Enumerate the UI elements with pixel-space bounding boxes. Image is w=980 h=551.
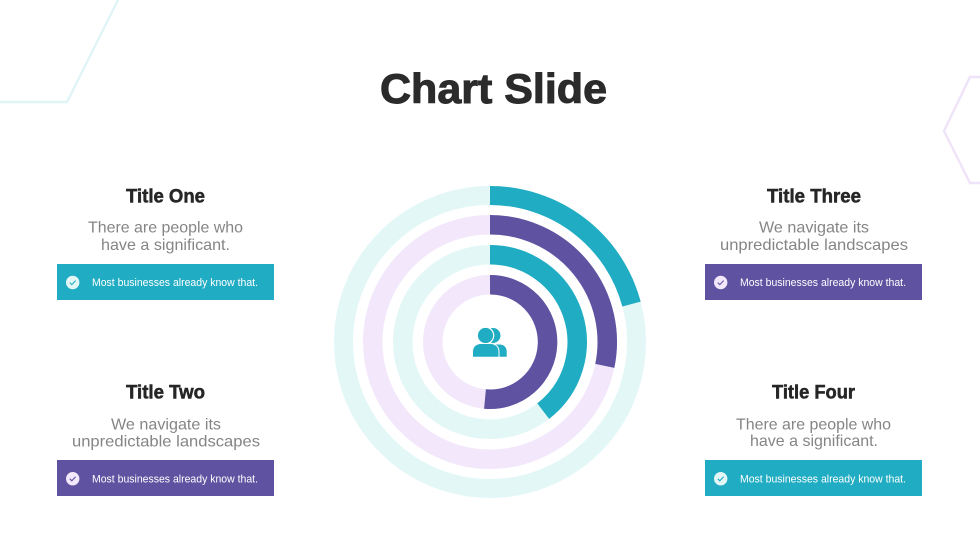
text block: title four xyxy=(736,416,891,450)
ring 2 track xyxy=(373,225,607,459)
panel: title four xyxy=(705,382,922,496)
callout bar: title one xyxy=(57,264,274,300)
callout bar: title two xyxy=(57,460,274,496)
panel: title three xyxy=(705,186,922,300)
text block: title two: We navigate its xyxy=(111,416,221,433)
ring 1 value arc xyxy=(490,196,632,304)
heading: title three: Title Three xyxy=(767,186,861,208)
ring 1 track xyxy=(344,196,636,488)
ring 2 value arc xyxy=(490,225,607,366)
text block: title four: have a significant. xyxy=(750,433,878,450)
ring 4 track xyxy=(433,285,547,399)
text block: title one: There are people who xyxy=(88,220,243,237)
heading: title four: Title Four xyxy=(772,382,856,404)
panel: title one xyxy=(57,186,274,300)
callout bar: title three xyxy=(705,264,922,300)
heading: title one: Title One xyxy=(126,186,205,208)
decorative hexagon: top left xyxy=(0,0,118,102)
text block: title one: have a significant. xyxy=(101,237,230,254)
ring 4 value arc xyxy=(485,285,548,399)
text block: title three: We navigate its xyxy=(759,220,869,237)
text block: title two xyxy=(72,416,260,450)
callout bar: title four: Most businesses already know that. xyxy=(740,473,906,485)
text block: title three xyxy=(720,220,908,254)
callout bar: title three: Most businesses already know that. xyxy=(740,277,906,289)
text block: title one xyxy=(88,220,243,254)
ring 3 track xyxy=(403,255,577,429)
text block: title three: unpredictable landscapes xyxy=(720,237,908,254)
text block: title two: unpredictable landscapes xyxy=(72,434,260,450)
text block: title four: There are people who xyxy=(736,416,891,433)
heading: title two: Title Two xyxy=(126,382,205,404)
panel: title two xyxy=(57,382,274,496)
decorative hexagon: right edge xyxy=(944,77,980,183)
title: Chart Slide xyxy=(380,65,607,112)
icon: people xyxy=(473,327,507,357)
radial bar chart xyxy=(344,196,636,488)
ring 3 value arc xyxy=(490,255,577,411)
callout bar: title four xyxy=(705,460,922,496)
callout bar: title two: Most businesses already know that. xyxy=(92,473,258,485)
callout bar: title one: Most businesses already know that. xyxy=(92,277,258,289)
